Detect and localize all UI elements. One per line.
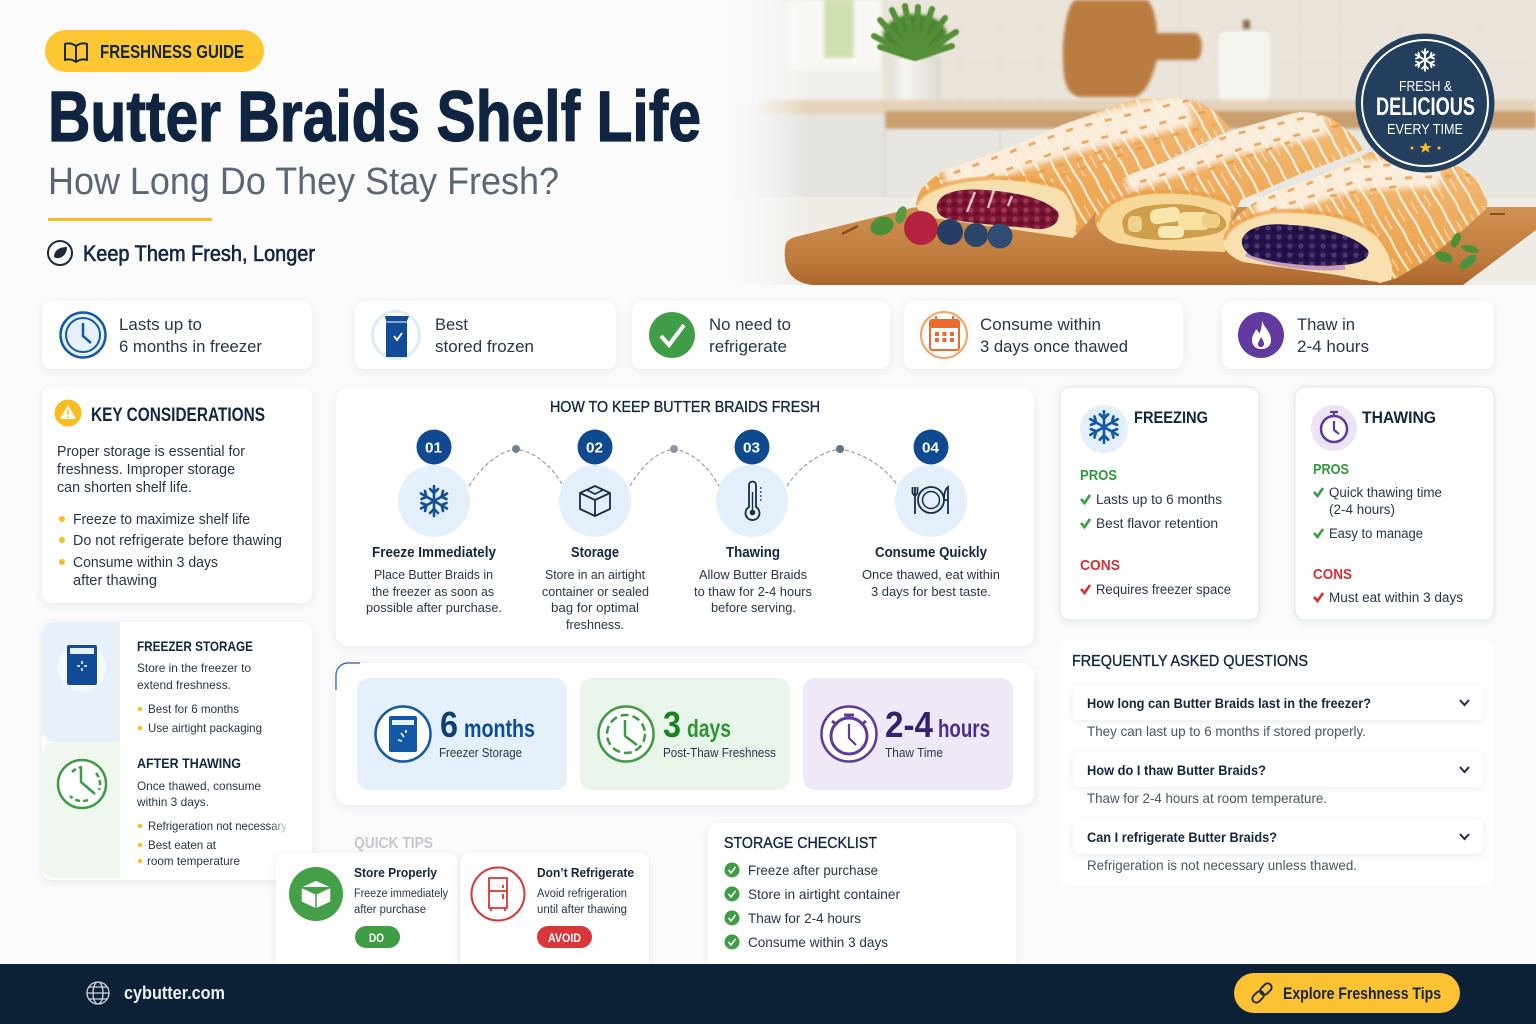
badge: fresh and delicious: FRESH &: [1399, 78, 1452, 95]
step 02: Store in an airtight: [545, 568, 646, 582]
panel: key considerations: freshness. Improper storage: [57, 462, 235, 478]
fact card: no need to refrigerate: refrigerate: [709, 337, 787, 356]
hero photo: butter braids on a cutting board: [720, 0, 1536, 290]
stat: 2-4 hours: 2-4: [885, 704, 933, 745]
fact card: thaw in 2-4 hours: [1222, 301, 1494, 369]
tip card: store properly: [276, 853, 458, 978]
button: explore freshness tips: [1234, 973, 1460, 1013]
step 02: bag for optimal: [551, 601, 639, 615]
fact card: lasts up to 6 months: [42, 301, 312, 369]
fact card: best stored frozen: stored frozen: [435, 337, 534, 356]
pill: freshness guide: FRESHNESS GUIDE: [100, 42, 244, 62]
panel: thawing pros and cons: [1295, 387, 1494, 620]
panel: how to keep butter braids fresh: HOW TO KEEP BUTTER BRAIDS FRESH: [550, 399, 820, 416]
stat: 3 days: 3: [663, 704, 681, 745]
stat: 3 days: Post-Thaw Freshness: [663, 746, 776, 760]
panel: storage details: AFTER THAWING: [137, 755, 241, 771]
stat: 3 days: days: [687, 715, 731, 743]
panel: storage details: Store in the freezer to: [137, 661, 251, 675]
badge: fresh and delicious: DELICIOUS: [1376, 93, 1475, 121]
panel: storage details: Use airtight packaging: [148, 721, 262, 735]
badge: fresh and delicious: EVERY TIME: [1387, 121, 1463, 138]
fact card: lasts up to 6 months: 6 months in freezer: [119, 337, 262, 356]
step 03: [694, 430, 812, 615]
stat: 2-4 hours: Thaw Time: [885, 746, 943, 760]
step 04: 3 days for best taste.: [871, 585, 991, 599]
stat: 3 days: [580, 678, 790, 790]
tip card: don't refrigerate: until after thawing: [537, 904, 627, 916]
stat: 6 months: months: [464, 715, 535, 743]
step 01: Place Butter Braids in: [374, 568, 493, 582]
stat: 6 months: Freezer Storage: [439, 746, 522, 760]
fact card: consume within 3 days: 3 days once thawed: [980, 337, 1128, 356]
faq item 3: Can I refrigerate Butter Braids?: [1087, 829, 1277, 845]
panel: storage details: Once thawed, consume: [137, 779, 261, 793]
panel: key considerations: KEY CONSIDERATIONS: [91, 405, 265, 426]
berries and mint: [868, 205, 1480, 272]
faq item 3: Refrigeration is not necessary unless thawed.: [1087, 857, 1357, 873]
panel: storage details: extend freshness.: [137, 678, 231, 692]
tip card: don't refrigerate: Avoid refrigeration: [537, 888, 627, 900]
panel: storage details: FREEZER STORAGE: [137, 638, 253, 654]
badge: fresh and delicious: [1356, 34, 1494, 172]
tagline with icon: Keep Them Fresh, Longer: [83, 241, 315, 266]
step 01: 01: [425, 440, 442, 456]
stat: 2-4 hours: [803, 678, 1013, 790]
step 02: freshness.: [566, 618, 624, 632]
faq item 3: [1073, 819, 1483, 873]
step 02: Storage: [571, 545, 619, 561]
step 04: Once thawed, eat within: [862, 568, 1000, 582]
panel: key considerations: Consume within 3 days: [73, 555, 218, 571]
faq item 2: Thaw for 2-4 hours at room temperature.: [1087, 790, 1327, 806]
panel: thawing pros and cons: THAWING: [1362, 408, 1436, 427]
panel: storage checklist: [708, 823, 1016, 978]
panel: key considerations: after thawing: [73, 573, 157, 589]
step 01: Freeze Immediately: [372, 545, 496, 561]
step 03: to thaw for 2-4 hours: [694, 585, 812, 599]
panel: storage checklist: Store in airtight container: [748, 886, 900, 902]
panel: storage checklist: Thaw for 2-4 hours: [748, 910, 861, 926]
stat: 6 months: [357, 678, 567, 790]
icon: globe: [87, 982, 109, 1004]
panel: storage checklist: Consume within 3 days: [748, 934, 888, 950]
heading: quick tips: QUICK TIPS: [354, 835, 433, 852]
tip card: don't refrigerate: [460, 853, 649, 978]
panel: storage details: Best eaten at: [148, 838, 217, 852]
faq item 1: [1073, 685, 1483, 739]
panel: thawing pros and cons: Must eat within 3 days: [1329, 590, 1463, 605]
tip card: store properly: DO: [369, 931, 384, 945]
title: Butter Braids Shelf Life: [48, 78, 701, 157]
panel: freezing pros and cons: Requires freezer space: [1096, 582, 1231, 597]
footer bar: cybutter.com: [124, 983, 225, 1003]
panel: storage details: within 3 days.: [136, 795, 209, 809]
panel: storage details: Best for 6 months: [148, 702, 239, 716]
panel: key considerations: Do not refrigerate before thawing: [73, 533, 282, 549]
panel: storage details: room temperature: [147, 854, 240, 868]
fact card: thaw in 2-4 hours: 2-4 hours: [1297, 337, 1369, 356]
panel: freezing pros and cons: [1060, 387, 1259, 620]
fact card: thaw in 2-4 hours: Thaw in: [1297, 315, 1355, 334]
panel: key considerations: can shorten shelf life.: [57, 480, 192, 496]
cutting board: [785, 207, 1536, 285]
panel: key considerations: [42, 387, 312, 603]
step 04: 04: [922, 440, 940, 456]
panel: key considerations: Proper storage is essential for: [57, 444, 245, 460]
panel: storage checklist: STORAGE CHECKLIST: [724, 835, 877, 852]
panel: thawing pros and cons: CONS: [1313, 566, 1352, 583]
panel: frequently asked questions: FREQUENTLY ASKED QUESTIONS: [1072, 653, 1308, 670]
step 01: the freezer as soon as: [372, 585, 494, 599]
tip card: don't refrigerate: AVOID: [548, 931, 581, 945]
step 03: before serving.: [711, 601, 796, 615]
step 02: 02: [586, 440, 603, 456]
panel: thawing pros and cons: (2-4 hours): [1329, 502, 1395, 517]
step 01: [366, 430, 502, 615]
panel: thawing pros and cons: Quick thawing time: [1329, 485, 1442, 500]
pill: freshness guide: [45, 30, 264, 72]
panel: how to keep butter braids fresh: [336, 387, 1034, 646]
fact card: best stored frozen: [355, 301, 616, 369]
faq item 1: They can last up to 6 months if stored properly.: [1087, 723, 1366, 739]
panel: storage details: [42, 622, 312, 880]
button: explore freshness tips: Explore Freshness Tips: [1283, 984, 1441, 1003]
step 03: Thawing: [726, 545, 780, 561]
panel: key considerations: Freeze to maximize shelf life: [73, 512, 250, 528]
panel: thawing pros and cons: PROS: [1313, 461, 1349, 478]
panel: freezing pros and cons: PROS: [1080, 467, 1117, 484]
step 02: container or sealed: [542, 585, 649, 599]
panel: freezing pros and cons: Best flavor retention: [1096, 516, 1218, 531]
stat: 2-4 hours: hours: [938, 715, 990, 743]
panel: thawing pros and cons: Easy to manage: [1329, 526, 1423, 541]
stat: 6 months: 6: [440, 704, 458, 745]
fact card: no need to refrigerate: No need to: [709, 315, 791, 334]
footer bar: [0, 964, 1536, 1024]
step 04: [862, 430, 1000, 599]
fact card: no need to refrigerate: [632, 301, 890, 369]
faq item 2: How do I thaw Butter Braids?: [1087, 762, 1266, 778]
tip card: store properly: Store Properly: [354, 865, 438, 880]
step 01: possible after purchase.: [366, 601, 502, 615]
panel: freezing pros and cons: Lasts up to 6 months: [1096, 492, 1222, 507]
fact card: best stored frozen: Best: [435, 315, 468, 334]
panel: storage checklist: Freeze after purchase: [748, 862, 878, 878]
faq item 2: [1073, 752, 1483, 806]
panel: key numbers: [336, 663, 1034, 805]
fact card: consume within 3 days: Consume within: [980, 315, 1101, 334]
step 03: Allow Butter Braids: [699, 568, 807, 582]
faq item 1: How long can Butter Braids last in the freezer?: [1087, 695, 1371, 711]
tip card: store properly: Freeze immediately: [354, 888, 448, 900]
fact card: lasts up to 6 months: Lasts up to: [119, 315, 202, 334]
step 04: Consume Quickly: [875, 545, 987, 561]
tip card: don't refrigerate: Don’t Refrigerate: [537, 865, 634, 880]
tip card: store properly: after purchase: [354, 904, 426, 916]
panel: freezing pros and cons: FREEZING: [1134, 408, 1208, 427]
panel: storage details: Refrigeration not necessary: [148, 819, 287, 833]
subtitle: How Long Do They Stay Fresh?: [48, 161, 559, 203]
panel: frequently asked questions: [1060, 640, 1494, 886]
step 02: [542, 430, 649, 632]
step 03: 03: [743, 440, 760, 456]
fact card: consume within 3 days: [904, 301, 1183, 369]
panel: freezing pros and cons: CONS: [1080, 557, 1120, 574]
